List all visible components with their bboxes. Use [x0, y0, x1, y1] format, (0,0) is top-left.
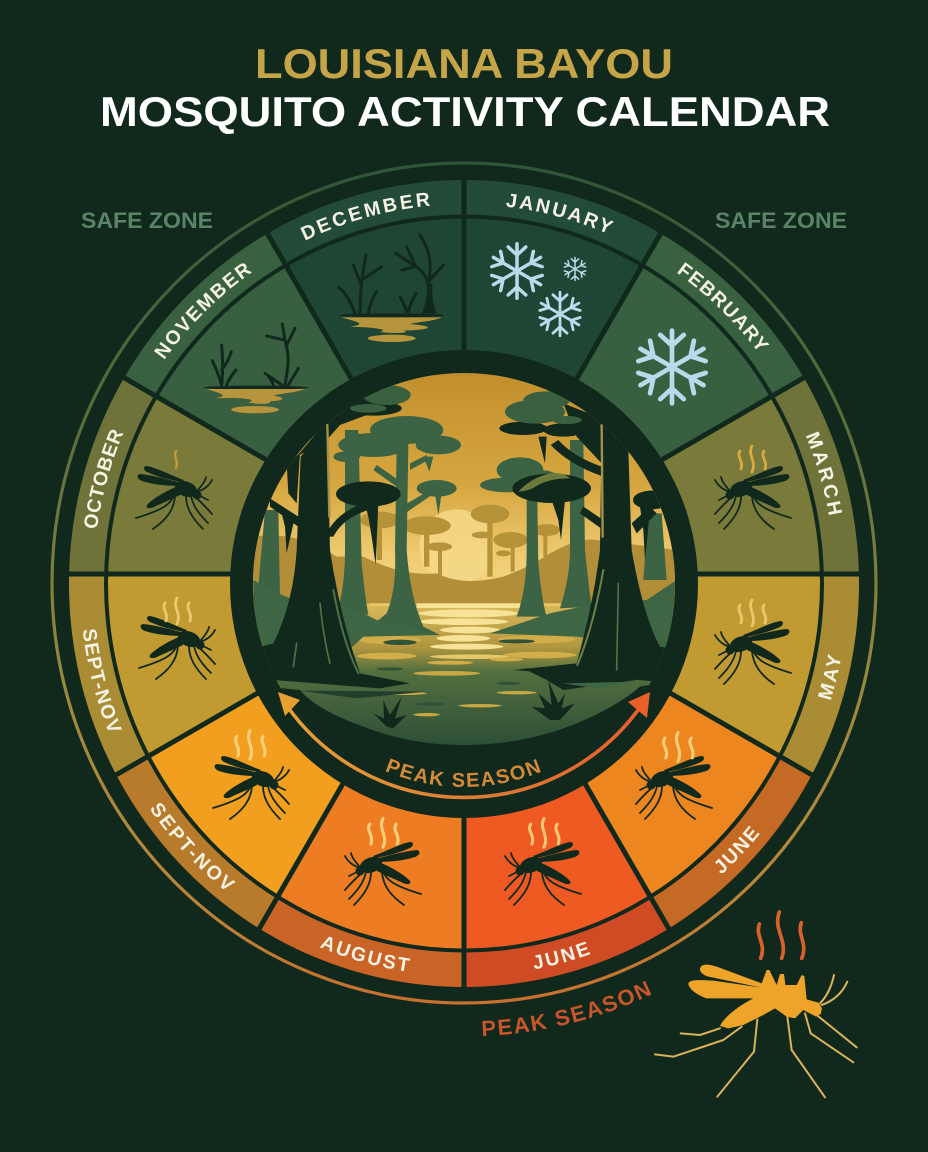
title	[100, 40, 830, 135]
icon: heat waves	[758, 912, 804, 958]
label: October: OCTOBER	[84, 430, 124, 528]
panel: August	[262, 785, 462, 987]
label: Sept-Nov: SEPT-NOV	[151, 803, 236, 890]
trunk highlights	[293, 425, 618, 673]
panel: January	[466, 180, 658, 378]
icon: mosquito	[715, 446, 791, 529]
big dark trees	[262, 436, 665, 688]
icon: large snowflake	[635, 331, 709, 403]
icon: snowflakes	[489, 244, 587, 336]
label: December: DECEMBER	[300, 192, 430, 240]
label: November: NOVEMBER	[154, 263, 252, 360]
icon: mosquito	[636, 733, 712, 819]
label: safe zone right: SAFE ZONE	[715, 208, 847, 233]
icon: swamp with bare branches	[203, 324, 309, 413]
label: peak season outer: PEAK SEASON	[482, 980, 652, 1036]
grass	[373, 680, 575, 728]
outer ring line	[52, 163, 876, 1003]
icon: mosquito	[136, 451, 212, 529]
label: August: AUGUST	[320, 936, 410, 972]
panel: Sept-Nov upper	[69, 576, 256, 772]
label: March: MARCH	[806, 432, 842, 515]
panel: June right	[588, 696, 810, 928]
panel: December	[270, 180, 462, 378]
panel: October	[69, 380, 264, 572]
panel: February	[579, 234, 802, 458]
icon: large orange mosquito	[655, 912, 857, 1097]
label: safe zone left: SAFE ZONE	[81, 208, 213, 233]
label: June: JUNE	[715, 826, 760, 874]
icon: mosquito	[715, 600, 791, 684]
center scene: bayou	[253, 373, 675, 749]
panel: Sept-Nov lower	[118, 696, 340, 928]
label: February: FEBRUARY	[677, 262, 770, 350]
back trees	[258, 416, 667, 635]
panel: June bottom	[466, 785, 667, 987]
center hub ring	[230, 350, 698, 818]
title: MOSQUITO ACTIVITY CALENDAR	[100, 88, 830, 135]
upper crowns	[297, 393, 630, 463]
panel: March	[664, 380, 859, 572]
icon: mosquito	[345, 819, 421, 905]
label: peak season inner: PEAK SEASON	[386, 758, 541, 787]
label: Sept-Nov: SEPT-NOV	[83, 629, 122, 730]
icon: swamp with bare trees	[338, 235, 444, 342]
icon: mosquito	[505, 819, 581, 905]
foreground ground	[280, 685, 649, 750]
panel: May	[672, 576, 859, 772]
icon: mosquito	[139, 598, 215, 679]
arrow: peak season arc	[278, 692, 650, 797]
banks	[253, 580, 440, 652]
icon: mosquito	[213, 731, 289, 819]
title: LOUISIANA BAYOU	[255, 40, 673, 87]
wedge dividers	[69, 180, 859, 987]
label: June: JUNE	[534, 942, 590, 969]
panel: November	[126, 234, 349, 458]
label: May: MAY	[818, 654, 840, 700]
label: January: JANUARY	[506, 194, 614, 232]
